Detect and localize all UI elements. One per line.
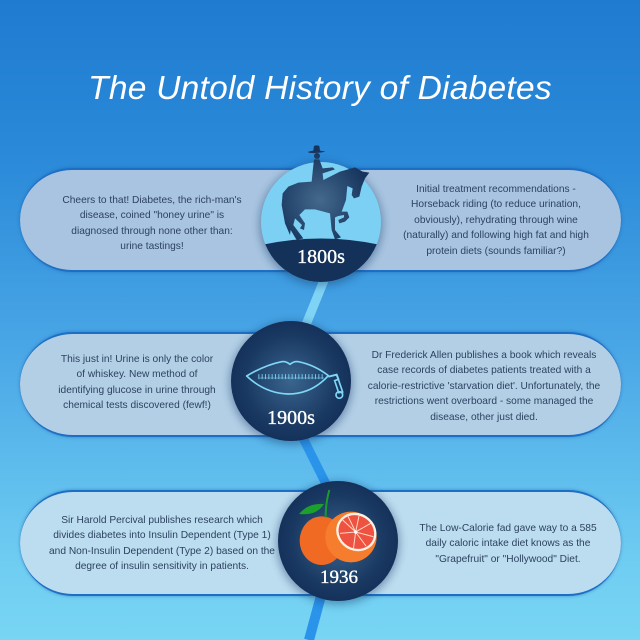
text: 1800s right xyxy=(403,184,589,257)
text: 1800s left: urine tastings! xyxy=(120,241,184,252)
panel: 1800s xyxy=(20,168,621,272)
text: 1936 right xyxy=(419,523,597,565)
text: 1936 left: divides diabetes into Insulin Dependent (Type 1) xyxy=(53,530,271,541)
text: 1900s right: calorie-restrictive 'starvation diet'. Unfortunately, the xyxy=(368,381,600,392)
text: 1800s left xyxy=(62,195,242,252)
text: 1900s right xyxy=(368,350,600,423)
text: 1936 left: Sir Harold Percival publishes research which xyxy=(61,515,263,526)
text: 1900s left xyxy=(58,354,216,411)
icon: horse and rider xyxy=(282,145,369,240)
text: 1900s left: of whiskey. New method of xyxy=(76,369,197,380)
medallions xyxy=(224,145,404,609)
icon: zipped lips xyxy=(247,362,343,398)
text: 1900s left: chemical tests discovered (fewf!) xyxy=(63,400,211,411)
medallion: 1936 xyxy=(276,481,400,605)
text: 1800s left: Cheers to that! Diabetes, the rich-man's xyxy=(62,195,242,206)
title: The Untold History of Diabetes xyxy=(88,70,552,107)
medallion: 1900s xyxy=(229,321,353,445)
text: 1800s left: disease, coined "honey urine" is xyxy=(80,210,224,221)
text: 1900s right: Dr Frederick Allen publishes a book which reveals xyxy=(372,350,596,361)
text: 1936 left: and Non-Insulin Dependent (Type 2) based on the xyxy=(49,546,275,557)
text: 1800s right: obviously), rehydrating through wine xyxy=(414,215,578,226)
text: 1936 right: The Low-Calorie fad gave way to a 585 xyxy=(419,523,597,534)
text: 1936 right: "Grapefruit" or "Hollywood" Diet. xyxy=(435,554,581,565)
label: 1800s: 1800s xyxy=(297,246,345,268)
label: 1936: 1936 xyxy=(320,567,358,588)
label: 1900s: 1900s xyxy=(267,407,315,429)
panel: 1900s xyxy=(20,332,621,437)
text: 1800s right: protein diets (sounds familiar?) xyxy=(426,246,566,257)
panel: 1936 xyxy=(20,490,621,596)
text: 1900s right: restrictions went overboard - some managed the xyxy=(375,396,593,407)
text: 1800s right: Initial treatment recommendations - xyxy=(416,184,576,195)
text: 1800s right: (naturally) and following high fat and high xyxy=(403,230,589,241)
text: 1900s left: identifying glucose in urine through xyxy=(58,385,216,396)
text: 1900s left: This just in! Urine is only the color xyxy=(61,354,213,365)
text: 1936 left xyxy=(49,515,275,572)
text: 1936 right: daily caloric intake diet knows as the xyxy=(426,538,590,549)
text: 1900s right: case records of diabetes patients treated with a xyxy=(377,365,591,376)
text: 1900s right: disease, other just died. xyxy=(430,412,538,423)
text: 1936 left: degree of insulin sensitivity in patients. xyxy=(75,561,249,572)
text: 1800s right: Horseback riding (to reduce urination, xyxy=(411,199,581,210)
text: 1800s left: diagnosed through none other than: xyxy=(71,226,233,237)
icon: grapefruit xyxy=(299,490,384,565)
medallion: 1800s xyxy=(259,145,383,290)
